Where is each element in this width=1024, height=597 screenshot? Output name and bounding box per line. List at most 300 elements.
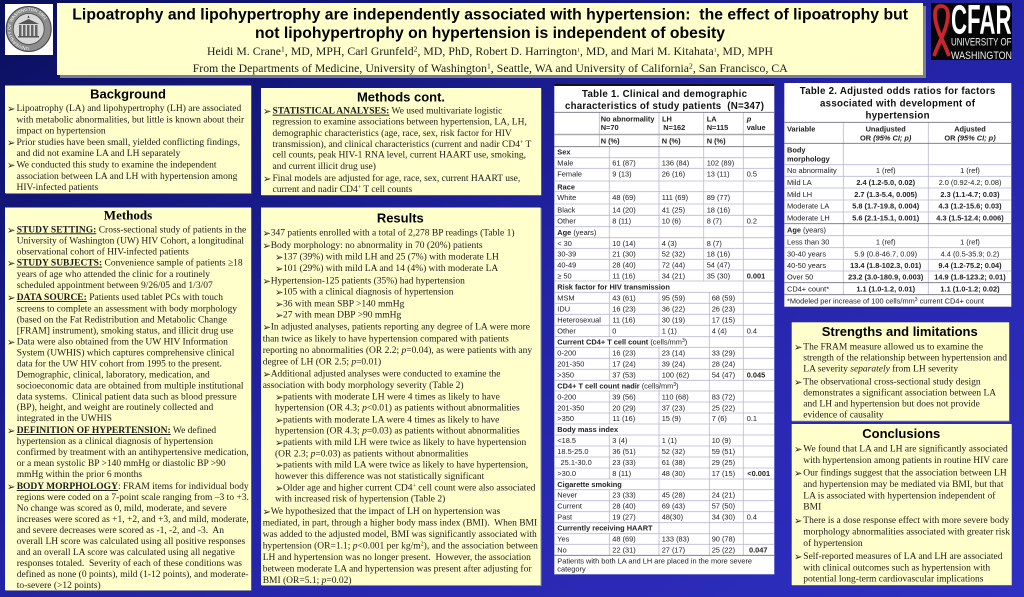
results bullets: ➢	[262, 323, 271, 334]
table 1 footnote: category	[557, 565, 586, 574]
strengths bullets: The FRAM measure allowed us to examine the	[803, 343, 983, 353]
strengths bullets: evidence of causality	[803, 409, 884, 420]
table 1 header: p	[746, 114, 752, 123]
table 2 body morphology rows: Moderate LA	[787, 202, 829, 211]
table 2 title	[800, 86, 995, 122]
statistical analyses bullets: cell counts, peak HIV-1 RNA level, current HAART use, smoking,	[272, 151, 526, 161]
results bullets: patients with mild LA were twice as likely to have hypertension,	[283, 461, 528, 471]
table 1 footnote	[557, 556, 752, 574]
results bullets: ➢	[275, 393, 283, 404]
authors and affiliations: 2	[414, 44, 418, 54]
table 1 section: body mass index	[557, 425, 770, 478]
results bullets: ➢	[275, 299, 283, 310]
table 1 section: cigarette smoking and HAART: 69 (43)	[662, 502, 685, 511]
results bullets: ➢	[275, 483, 283, 494]
background bullets: with metabolic abnormalities, but little is known about their	[16, 115, 245, 125]
conclusions bullets: morphology abnormalities associated with greater risk	[803, 528, 1010, 538]
table 1 footnote: Patients with both LA and LH are placed in the more severe	[557, 556, 752, 565]
results bullets: Hypertension-125 patients (35%) had hypertension	[271, 275, 465, 286]
table 1 section: cigarette smoking and HAART: 57 (50)	[712, 502, 735, 511]
table 1 title	[565, 89, 764, 112]
table 1 section: sex, race, age: 8 (7)	[707, 217, 722, 226]
panel: conclusions	[792, 424, 1012, 586]
table 1 section: sex, race, age: 72 (44)	[662, 261, 685, 270]
results bullets: reporting no abnormalities (OR 2.2; p=0.04), as were patients with any	[263, 345, 532, 356]
table 1 section: CD4 counts: 100 (62)	[662, 370, 689, 379]
table 1 section: sex, race, age: ≥ 50	[557, 271, 572, 280]
table 1 section: body mass index: 48 (30)	[662, 469, 685, 478]
table 1 section: cigarette smoking and HAART: 28 (40)	[612, 502, 636, 511]
table 1 section: CD4 counts: 0-200	[557, 392, 576, 401]
results bullets: ➢	[262, 276, 271, 287]
table 1 section: risk factor: 11 (16)	[612, 316, 635, 325]
table 2 age rows: Less than 30	[787, 237, 829, 246]
table 2 body morphology rows	[787, 145, 1004, 223]
poster title: Lipoatrophy and lipohypertrophy are independently associated with hypertension: the effect of lipoatrophy but	[72, 6, 909, 24]
strengths bullets: The observational cross-sectional study design	[803, 378, 981, 388]
table 1 section: sex, race, age: Other	[557, 217, 576, 226]
table 1 section: sex, race, age: 11 (16)	[612, 271, 635, 280]
table 2 body morphology rows: Body	[787, 145, 806, 154]
table 1 section: CD4 counts: 25 (22)	[712, 403, 735, 412]
table 1 section: body mass index: 25.1-30.0	[558, 458, 592, 467]
results bullets: cell count were also associated	[416, 483, 536, 493]
table 1 section: risk factor: 26 (23)	[712, 305, 735, 314]
background bullets: and did not examine LA and LH separately	[16, 149, 181, 159]
methods bullets: (based on the Fat Redistribution and Metabolic Change	[17, 314, 227, 325]
results bullets: ➢	[262, 229, 271, 240]
conclusions bullets: Our findings suggest that the association between LH	[803, 468, 1007, 479]
statistical analyses bullets	[263, 107, 532, 195]
table 2 CD4 row: 1.1 (1.0-1.2; 0.02)	[940, 285, 1000, 294]
results bullets: hypertension (OR 4.3; p=0.03) as patients without abnormalities	[275, 426, 520, 437]
table 2 body morphology rows: 2.0 (0.92-4.2; 0.08)	[939, 178, 1001, 187]
results bullets: ➢	[275, 415, 283, 426]
methods bullets: observational cohort of HIV-infected patients	[17, 246, 189, 257]
table 1 section: body mass index: 8 (11)	[612, 469, 631, 478]
table 2 header: Unadjusted	[866, 125, 906, 134]
results bullets: ➢	[262, 370, 271, 381]
panel: results	[261, 208, 542, 586]
results bullets: ➢	[275, 311, 283, 322]
table 1 section: risk factor: 0.4	[747, 327, 757, 336]
table 1 header: No abnormality	[601, 114, 655, 123]
table 1 section: CD4 counts: 16 (23)	[612, 348, 636, 357]
methods bullets: responses totaled. Severity of each of these conditions was	[17, 558, 242, 569]
table 1 section: CD4 counts: 0.1	[747, 414, 757, 423]
table 1 section: cigarette smoking and HAART: 45 (28)	[662, 491, 685, 500]
table 1 section: risk factor: 43 (61)	[612, 294, 636, 303]
table 1 section: sex, race, age: 0.2	[747, 217, 757, 226]
table 1 section: CD4 counts: 110 (68)	[662, 392, 689, 401]
table 1 section: body mass index: 61 (38)	[662, 458, 685, 467]
table 1 section: sex, race, age: 8 (11)	[612, 217, 631, 226]
table 1 section: sex, race, age	[557, 148, 765, 280]
table 2 age rows: 1 (ref)	[960, 237, 980, 246]
table 1 section: cigarette smoking and HAART: 23 (33)	[612, 491, 636, 500]
table 1 section: cigarette smoking and HAART: 25 (22)	[712, 546, 735, 555]
table 1 section: cigarette smoking and HAART: 0.4	[747, 513, 757, 522]
table 2 header: OR (95% CI; p)	[944, 133, 996, 142]
table 1 section: cigarette smoking and HAART: Current	[557, 502, 582, 511]
results bullets: mediated, in part, through a higher body mass index (BMI). When BMI	[263, 517, 537, 528]
statistical analyses bullets: T	[523, 140, 532, 150]
conclusions bullets	[794, 444, 1010, 585]
results bullets: hypertension (OR 4.3; p<0.01) as patients without abnormalities	[275, 402, 520, 413]
background bullets: Prior studies have been small, yielded conflicting findings,	[16, 137, 240, 148]
table 1 section: CD4 counts	[557, 337, 765, 423]
table 2 title: Table 2. Adjusted odds ratios for factors	[800, 86, 995, 97]
results bullets: hypertension (OR=1.1; p<0.001 per kg/m	[263, 542, 421, 552]
table 1 section: CD4 counts: 28 (24)	[712, 359, 735, 368]
table 1 section: sex, race, age: 8 (7)	[707, 239, 722, 248]
table 1 section: CD4 counts: CD4+ T cell count nadir (cells/mm	[557, 381, 673, 390]
table 1 section: sex, race, age: Male	[557, 159, 573, 168]
table 2 age rows: 14.9 (1.8-123.2; 0.01)	[934, 273, 1006, 282]
methods bullets: No change was scored as 0, mild, moderate, and severe	[17, 504, 227, 514]
authors and affiliations: Heidi M. Crane	[207, 45, 281, 58]
results bullets: ➢	[275, 438, 283, 449]
table 1 section: cigarette smoking and HAART: 48 (69)	[612, 535, 636, 544]
table 2: adjusted odds ratios	[784, 83, 1011, 307]
methods bullets: [FRAM] instrument), smoking status, and illicit drug use	[17, 325, 233, 336]
table 2 header: OR (95% CI; p)	[860, 133, 912, 142]
poster title	[72, 6, 909, 42]
table 2 footnote: 3	[915, 297, 918, 303]
conclusions bullets: and hypertension may be mediated via BMI, but that	[803, 480, 1004, 490]
results bullets: In adjusted analyses, patients reporting any degree of LA were more	[271, 322, 530, 333]
authors and affiliations	[193, 44, 788, 75]
heading: methods cont.: Methods cont.	[357, 90, 445, 104]
poster title: not lipohypertrophy on hypertension is independent of obesity	[255, 25, 725, 42]
table 1 section: CD4 counts: 7 (6)	[712, 414, 727, 423]
table 1 section: cigarette smoking and HAART: 133 (83)	[662, 535, 689, 544]
table 1 section: cigarette smoking and HAART: 90 (78)	[712, 535, 735, 544]
table 2 body morphology rows: Moderate LH	[787, 214, 830, 223]
panel: background	[5, 86, 252, 194]
table 1 header: LA	[707, 114, 717, 123]
table 1 section: body mass index: 29 (25)	[712, 458, 735, 467]
table 1 section: CD4 counts: >350	[557, 370, 574, 379]
methods bullets: STUDY SETTING: Cross-sectional study of patients in the	[17, 224, 246, 235]
table 1 section: CD4 counts: 20 (29)	[612, 403, 636, 412]
table 1 section: sex, race, age: 48 (69)	[612, 193, 636, 202]
results bullets: ), and the association between	[424, 541, 538, 552]
background bullets: ➢	[7, 161, 15, 172]
table 1 section: sex, race, age: 102 (89)	[707, 159, 734, 168]
results bullets: degree of LH (OR 2.5; p=0.01)	[263, 356, 381, 367]
table 1 section: CD4 counts: )	[685, 337, 687, 346]
authors and affiliations: , MD, MPH, Carl Grunfeld	[285, 45, 414, 58]
background bullets: HIV-infected patients	[16, 182, 98, 193]
results bullets: ➢	[275, 264, 283, 275]
methods bullets: University of Washington (UW) HIV Cohort, a longitudinal	[17, 235, 244, 246]
strengths bullets: demonstrates a significant association between LA	[803, 388, 996, 399]
methods bullets: ➢	[7, 225, 15, 236]
table 1 section: body mass index: <18.5	[557, 436, 576, 445]
table 2 age rows	[787, 225, 1006, 282]
table 2 age rows: 30-40 years	[787, 249, 826, 258]
logo: CFAR University of Washington	[931, 0, 1012, 62]
table 1 header	[601, 114, 766, 146]
methods bullets: ➢	[7, 293, 15, 304]
results bullets: ➢	[275, 461, 283, 472]
table 2 age rows: 23.2 (3.0-180.9, 0.003)	[848, 273, 924, 282]
conclusions bullets: BMI	[803, 503, 821, 513]
table 2 body morphology rows: 4.3 (1.5-12.4; 0.006)	[936, 214, 1004, 223]
table 1 section: risk factor: 17 (15)	[712, 316, 735, 325]
table 1 section: risk factor: 68 (59)	[712, 294, 735, 303]
results bullets: 2	[421, 542, 424, 548]
results bullets: ➢	[262, 241, 271, 252]
statistical analyses bullets: T cell counts	[361, 185, 413, 195]
methods bullets: data systems. Clinical patient data such as blood pressure	[17, 393, 237, 403]
table 1 section: body mass index: 36 (51)	[612, 447, 636, 456]
background bullets: We conducted this study to examine the independent	[16, 161, 217, 171]
statistical analyses bullets: STATISTICAL ANALYSES: We used multivariate logistic	[272, 107, 502, 117]
results bullets: 137 (39%) with mild LH and 25 (7%) with moderate LH	[283, 252, 499, 263]
table 2 header: Adjusted	[954, 125, 986, 134]
table 1 section: sex, race, age: 14 (20)	[612, 206, 636, 215]
results bullets: ➢	[275, 253, 283, 264]
table 2 title: hypertension	[866, 111, 930, 122]
table 2 CD4 row: CD4+ count*	[787, 285, 829, 294]
conclusions bullets: ➢	[794, 469, 802, 480]
background bullets: ➢	[7, 138, 15, 149]
table 1 section: sex, race, age: 13 (11)	[707, 169, 730, 178]
table 2 age rows: 5.9 (0.8-46.7, 0.09)	[854, 249, 917, 258]
table 2 footnote: *Modeled per increase of 100 cells/mm	[787, 296, 915, 305]
table 1 header: N (%)	[601, 137, 620, 146]
authors and affiliations: 1	[577, 48, 580, 54]
table 1 section: body mass index: >30.0	[557, 469, 576, 478]
title banner	[57, 3, 926, 78]
strengths bullets: LA severity separately from LH severity	[803, 364, 958, 375]
strengths bullets: strength of the relationship between hypertension and	[803, 353, 1007, 364]
background bullets: association between LA and LH with hypertension among	[16, 172, 238, 182]
methods bullets: defined as none (0 points), mild (1-12 points), and moderate-	[17, 569, 249, 580]
authors and affiliations: 1	[714, 48, 717, 54]
authors and affiliations: From the Departments of Medicine, University of Washington	[193, 62, 487, 75]
methods bullets: System (UWHIS) which captures comprehensive clinical	[17, 348, 235, 359]
table 1 section: sex, race, age: 34 (21)	[662, 271, 685, 280]
methods bullets: ➢	[7, 426, 15, 437]
authors and affiliations: 2	[689, 62, 693, 70]
results bullets: was added to the adjusted model, BMI was significantly associated with	[263, 529, 537, 540]
table 1 title: characteristics of study patients (N=347)	[565, 101, 764, 112]
table 1 header: LH	[662, 114, 672, 123]
results bullets: patients with moderate LA were 4 times as likely to have	[283, 415, 499, 425]
table 2 age rows: Age (years)	[787, 225, 826, 234]
table 1 section: cigarette smoking and HAART: Never	[557, 491, 578, 500]
table 1 section: risk factor: 1 (1)	[662, 327, 677, 336]
table 1 section: CD4 counts: 37 (23)	[662, 403, 685, 412]
table 1 section: sex, race, age: Race	[557, 182, 575, 191]
authors and affiliations: , Seattle, WA and University of California	[491, 62, 690, 75]
statistical analyses bullets: current and nadir CD4	[272, 185, 358, 195]
table 1 section: sex, race, age: 89 (77)	[707, 193, 730, 202]
table 1 section: CD4 counts: 54 (47)	[712, 370, 735, 379]
results bullets: (OR 2.3; p=0.03) as patients without abnormalities	[275, 448, 469, 459]
table 1 section: cigarette smoking and HAART: 0.047	[749, 546, 768, 555]
logo: CFAR University of Washington: WASHINGTON	[951, 50, 1012, 62]
table 1 section: sex, race, age: Sex	[557, 148, 571, 157]
conclusions bullets: with hypertension among patients in routine HIV care	[803, 456, 1008, 466]
background bullets: Lipoatrophy (LA) and lipohypertrophy (LH) are associated	[16, 103, 242, 114]
statistical analyses bullets: +	[520, 140, 524, 146]
table 1 section: CD4 counts: 39 (56)	[612, 392, 636, 401]
table 1 section: body mass index: Body mass index	[557, 425, 619, 434]
table 2 age rows: 4.4 (0.5-35.9; 0.2)	[941, 249, 999, 258]
table 2 age rows: Over 50	[787, 273, 813, 282]
table 1 section: sex, race, age: 0.001	[747, 271, 765, 280]
table 1 section: risk factor: 30 (19)	[662, 316, 685, 325]
table 2 body morphology rows: morphology	[787, 154, 831, 163]
conclusions bullets: LA is associated with hypertension independent of	[803, 491, 996, 502]
table 1 section: CD4 counts: 37 (53)	[612, 370, 636, 379]
table 2 body morphology rows: 2.4 (1.2-5.0, 0.02)	[856, 178, 916, 187]
statistical analyses bullets: and current illicit drug use)	[272, 161, 376, 172]
heading: results: Results	[377, 210, 424, 226]
results bullets: Body morphology: no abnormality in 70 (20%) patients	[271, 240, 483, 251]
table 1 header: N=115	[707, 123, 728, 132]
results bullets: however this difference was not statistically significant	[275, 471, 485, 482]
table 2 title: associated with development of	[820, 98, 976, 109]
table 1 section: sex, race, age: 4 (3)	[662, 239, 677, 248]
authors and affiliations: , MD, MPH	[717, 45, 774, 58]
table 1 section: sex, race, age: 18 (16)	[707, 206, 730, 215]
methods bullets: ➢	[7, 338, 15, 349]
results bullets: association with body morphology severity (Table 2)	[263, 380, 464, 391]
table 1 section: sex, race, age: Age (years)	[557, 228, 596, 237]
table 1 section: sex, race, age: 52 (32)	[662, 250, 685, 259]
table 1 section: sex, race, age: 111 (69)	[662, 193, 688, 202]
results bullets: +	[413, 483, 417, 489]
table 1 section: CD4 counts: 3	[673, 382, 676, 388]
table 1 section: sex, race, age: Female	[557, 169, 582, 178]
table 1 section: sex, race, age: 10 (6)	[662, 217, 681, 226]
strengths bullets	[794, 343, 1007, 420]
table 1 section: sex, race, age: Black	[557, 206, 576, 215]
table 1 section: sex, race, age: 54 (47)	[707, 261, 730, 270]
table 1 section: body mass index: 52 (32)	[662, 447, 685, 456]
results bullets: 105 with a clinical diagnosis of hypertension	[283, 287, 454, 298]
statistical analyses bullets: regression to examine associations between hypertension, LA, LH,	[272, 118, 527, 128]
table 1 section: sex, race, age: 61 (87)	[612, 159, 636, 168]
table 1 section: CD4 counts: 0-200	[557, 348, 576, 357]
conclusions bullets: Self-reported measures of LA and LH are associated	[803, 551, 1003, 562]
authors and affiliations: , San Francisco, CA	[693, 62, 788, 75]
methods bullets: screens to complete an assessment with body morphology	[17, 304, 237, 314]
results bullets: ➢	[262, 507, 271, 518]
table 1 section: sex, race, age: 26 (16)	[662, 169, 685, 178]
methods bullets	[7, 224, 249, 591]
table 1 section: sex, race, age: < 30	[557, 239, 572, 248]
statistical analyses bullets: Final models are adjusted for age, race, sex, current HAART use,	[272, 173, 520, 184]
table 1 section: body mass index: 18.5-25.0	[557, 447, 589, 456]
table 1 section: sex, race, age: 40-49	[557, 261, 576, 270]
table 2 body morphology rows: 5.6 (2.1-15.1, 0.001)	[852, 214, 920, 223]
background bullets: impact on hypertension	[16, 127, 106, 137]
table 1 section: sex, race, age: 0.5	[747, 169, 757, 178]
results bullets: with increased risk of hypertension (Table 2)	[275, 494, 445, 505]
table 1 section: body mass index: 1 (1)	[662, 436, 677, 445]
table 2 body morphology rows: 5.8 (1.7-19.8, 0.004)	[852, 202, 920, 211]
table 1 section: CD4 counts: 3	[682, 338, 685, 344]
table 2 CD4 row: 1.1 (1.0-1.2, 0.01)	[856, 285, 916, 294]
background bullets	[7, 103, 245, 193]
table 1 section: CD4 counts: 11 (16)	[612, 414, 635, 423]
table 1 section: CD4 counts: 17 (24)	[612, 359, 636, 368]
methods bullets: hypertension as a clinical diagnosis of hypertension	[17, 436, 213, 447]
methods bullets: confirmed by treatment with an antihypertensive medication,	[17, 447, 249, 458]
table 1 section: CD4 counts: 23 (14)	[662, 348, 685, 357]
panel: strengths and limitations	[792, 322, 1010, 422]
results bullets: Additional adjusted analyses were conducted to examine the	[271, 370, 500, 380]
table 1 section: risk factor: Other	[557, 327, 576, 336]
results bullets: BMI (OR=5.1; p=0.02)	[263, 575, 352, 586]
methods bullets: Demographic, clinical, laboratory, medication, and	[17, 371, 210, 381]
table 1 section: CD4 counts: Current CD4+ T cell count (cells/mm	[557, 337, 682, 346]
methods bullets: or a mean systolic BP >140 mmHg or diastolic BP >90	[17, 459, 226, 469]
table 1 section: CD4 counts: 83 (72)	[712, 392, 735, 401]
table 1 section: CD4 counts: 39 (24)	[662, 359, 685, 368]
table 2 body morphology rows: 1 (ref)	[876, 166, 896, 175]
methods bullets: to-severe (>12 points)	[17, 580, 101, 591]
table 1 section: CD4 counts: 201-350	[557, 359, 584, 368]
table 1 section: cigarette smoking and HAART: 19 (27)	[612, 513, 636, 522]
methods bullets: scheduled appointment between 9/26/05 and 1/3/07	[17, 281, 213, 291]
statistical analyses bullets: ➢	[263, 107, 271, 118]
table 1 section: risk factor: Risk factor for HIV transmission	[557, 282, 670, 291]
table 2 age rows: 13.4 (1.8-102.3, 0.01)	[850, 261, 922, 270]
conclusions bullets: potential long-term cardiovascular implications	[803, 575, 984, 585]
table 1 header: N=70	[601, 123, 619, 132]
table 1 section: sex, race, age: White	[557, 193, 576, 202]
table 1 section: cigarette smoking and HAART	[557, 480, 768, 555]
methods bullets: data for the UW HIV cohort from 1995 to the present.	[17, 359, 222, 370]
table 2 age rows: 1 (ref)	[876, 237, 896, 246]
table 1 section: risk factor	[557, 282, 757, 336]
conclusions bullets: of hypertension	[803, 538, 863, 549]
results bullets: Older age and higher current CD4	[283, 483, 413, 493]
table 1 section: sex, race, age: 41 (25)	[662, 206, 685, 215]
strengths bullets: and LH and hypertension but does not provide	[803, 400, 980, 410]
table 1 section: CD4 counts: 33 (29)	[712, 348, 735, 357]
methods bullets: Data were also obtained from the UW HIV Information	[17, 337, 228, 348]
table 1 section: risk factor: 4 (4)	[712, 327, 727, 336]
table 1 header: N=162	[663, 123, 685, 132]
table 1 section: cigarette smoking and HAART: Past	[557, 513, 572, 522]
table 1 section: cigarette smoking and HAART: No	[557, 546, 567, 555]
table 1 section: body mass index: 23 (33)	[612, 458, 636, 467]
results bullets: 101 (29%) with mild LA and 14 (4%) with moderate LA	[283, 263, 498, 274]
methods bullets: mmHg within the prior 6 months	[17, 470, 142, 480]
methods bullets: and severe decreases were scored as -1, -2, and -3. An	[17, 526, 224, 536]
statistical analyses bullets: ➢	[263, 174, 271, 185]
table 1 section: sex, race, age: 136 (84)	[662, 159, 689, 168]
conclusions bullets: with clinical outcomes such as hypertension with	[803, 563, 990, 573]
conclusions bullets: ➢	[794, 552, 802, 563]
table 1 section: sex, race, age: 30-39	[557, 250, 576, 259]
table 2 body morphology rows: 4.3 (1.2-15.6; 0.03)	[938, 202, 1002, 211]
strengths bullets: ➢	[794, 343, 802, 354]
table 1 section: body mass index: <0.001	[747, 469, 770, 478]
table 1 grid	[554, 112, 774, 555]
background bullets: ➢	[7, 104, 15, 115]
table 1 section: sex, race, age: 18 (16)	[707, 250, 730, 259]
results bullets: patients with moderate LH were 4 times as likely to have	[283, 393, 500, 403]
